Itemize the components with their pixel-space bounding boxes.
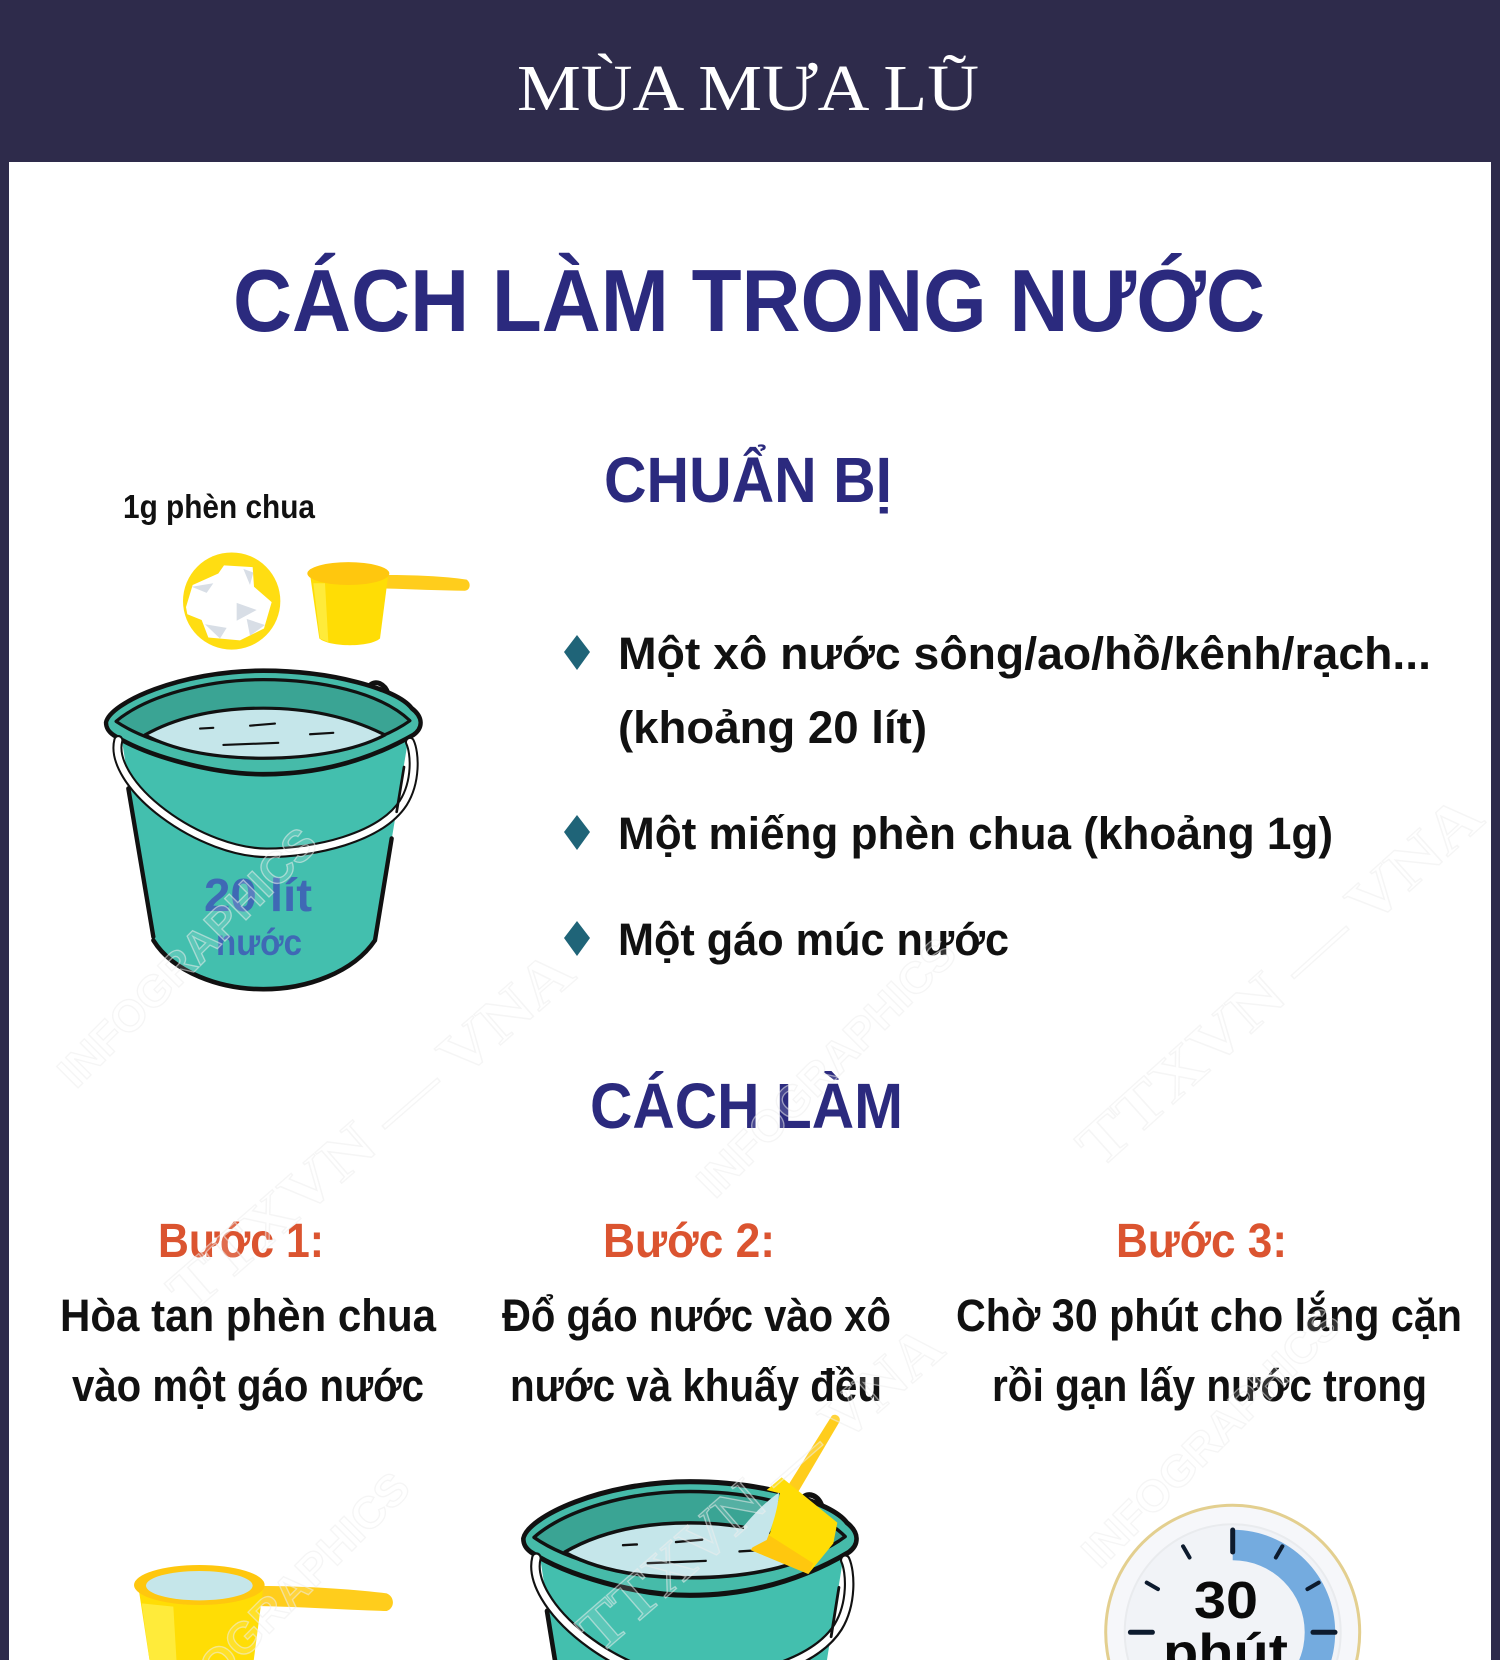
list item 2: Một miếng phèn chua (khoảng 1g): [618, 808, 1333, 859]
bullet diamond 2: [564, 815, 590, 850]
watermark right ttxvn: TTXVN — VNA: [1064, 782, 1496, 1180]
bullet diamond 1: [564, 635, 590, 670]
panel: step 3: [956, 1215, 1462, 1660]
step 2 heading: Bước 2:: [603, 1215, 775, 1268]
step 1 text line 2: vào một gáo nước: [72, 1360, 424, 1411]
watermark lower right infographics: INFOGRAPHICS: [1072, 1298, 1351, 1577]
watermark center infographics: INFOGRAPHICS: [687, 928, 966, 1207]
clock text 30: 30: [1194, 1572, 1258, 1630]
icon: water bucket with 20 litres: [106, 671, 421, 989]
list item 1 line 2: (khoảng 20 lít): [618, 702, 927, 753]
step 3 heading: Bước 3:: [1116, 1215, 1287, 1268]
panel: preparation list: [564, 443, 1431, 965]
bullet diamond 3: [564, 921, 590, 956]
label: nuoc: nước: [216, 922, 302, 963]
watermarks: [48, 782, 1496, 1660]
header title: MÙA MƯA LŨ: [517, 52, 979, 125]
label: alum amount: 1g phèn chua: [123, 488, 316, 525]
heading: prepare: CHUẨN BỊ: [604, 443, 892, 516]
panel: preparation illustration: [106, 488, 470, 989]
icon: ladle with water: [134, 1565, 393, 1660]
list item 1: Một xô nước sông/ao/hồ/kênh/rạch...: [618, 628, 1431, 679]
heading: method: CÁCH LÀM: [590, 1070, 903, 1142]
main heading: CÁCH LÀM TRONG NƯỚC: [233, 251, 1265, 350]
icon: 30 minute clock: [1106, 1505, 1360, 1660]
watermark left infographics: INFOGRAPHICS: [48, 818, 327, 1097]
icon: alum lumps: [183, 552, 280, 650]
panel: step 2: [502, 1215, 891, 1660]
step 3 text line 1: Chờ 30 phút cho lắng cặn: [956, 1290, 1462, 1341]
icon: bucket: [523, 1482, 857, 1660]
step 2 text line 1: Đổ gáo nước vào xô: [502, 1290, 891, 1341]
step 2 text line 2: nước và khuấy đều: [510, 1360, 882, 1411]
icon: tilted ladle pouring: [743, 1415, 840, 1574]
label: 20 lit: 20 lít: [204, 869, 312, 921]
panel: step 1: [60, 1215, 437, 1660]
step 3 text line 2: rồi gạn lấy nước trong: [992, 1360, 1427, 1411]
step 1 heading: Bước 1:: [158, 1215, 324, 1268]
icon: yellow ladle: [307, 562, 470, 645]
step 1 text line 1: Hòa tan phèn chua: [60, 1290, 437, 1341]
watermark left ttxvn: TTXVN — VNA: [155, 937, 587, 1326]
watermark lower ttxvn: TTXVN — VNA: [565, 1312, 957, 1660]
list item 3: Một gáo múc nước: [618, 914, 1009, 965]
